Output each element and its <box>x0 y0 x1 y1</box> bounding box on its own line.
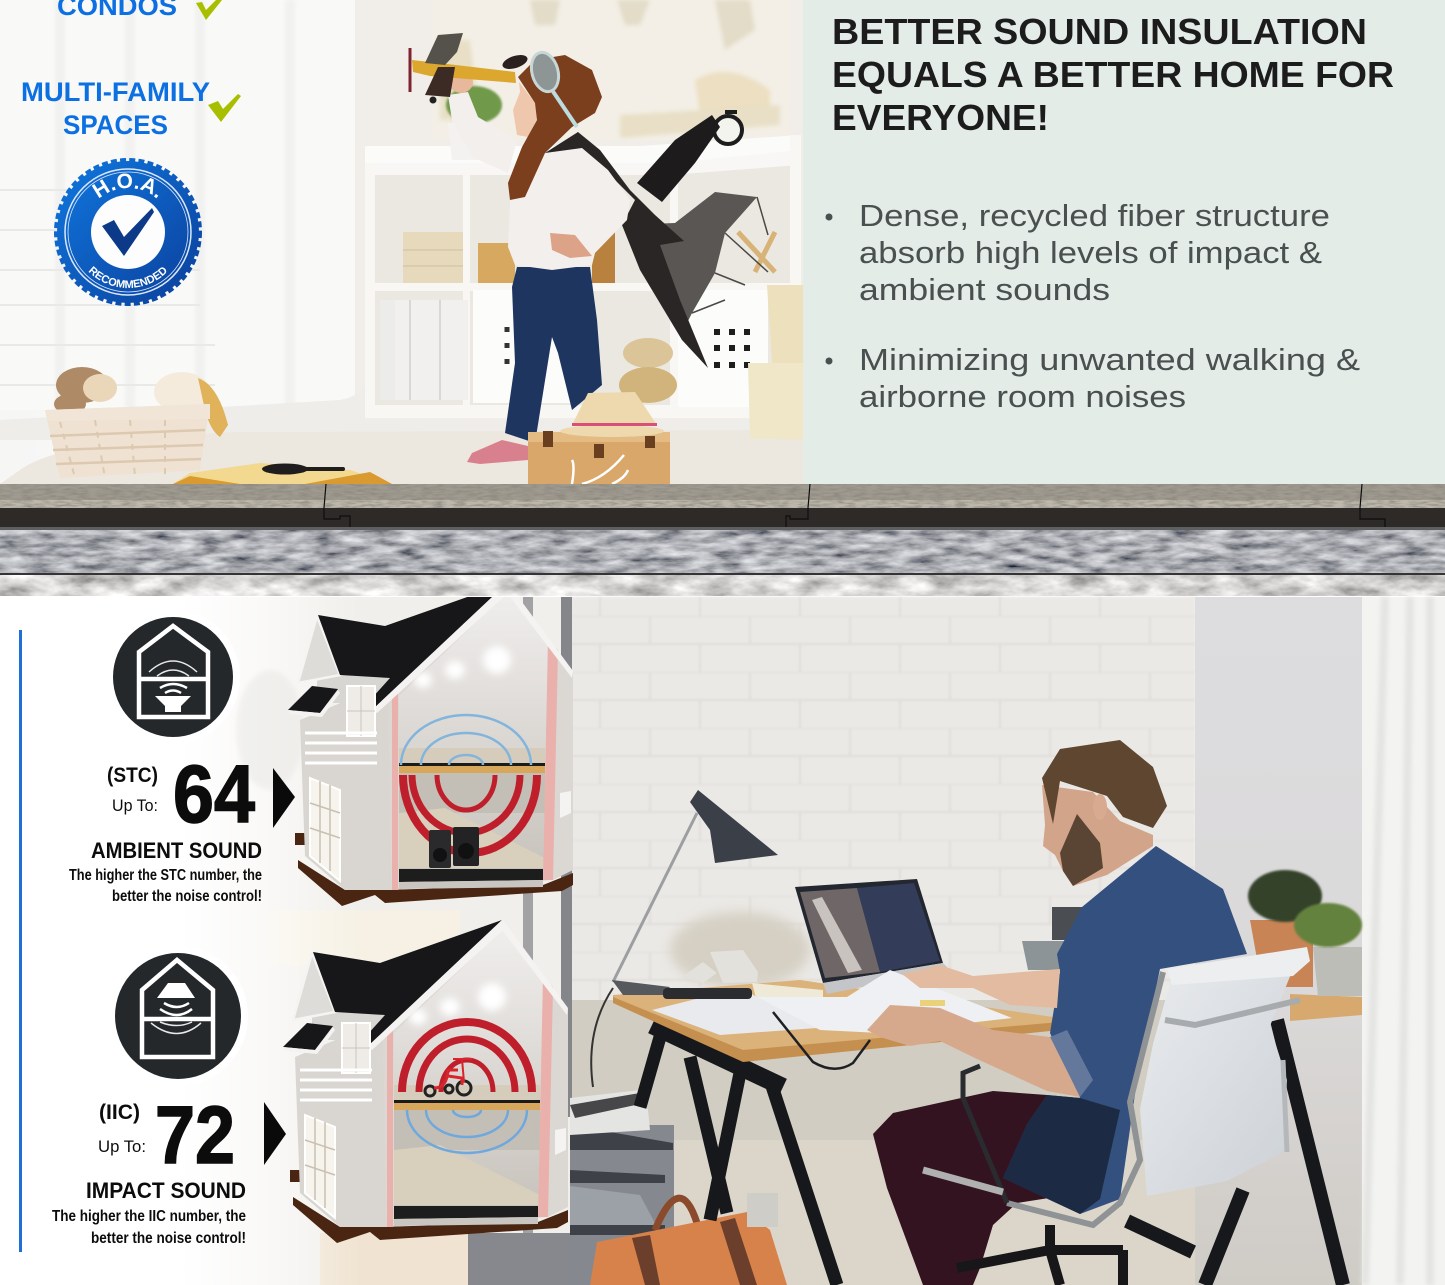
icon: speakers <box>429 827 479 868</box>
heading: EVERYONE! <box>832 97 1049 138</box>
alarm clock <box>714 112 742 144</box>
heading <box>832 11 1394 138</box>
bullet: minimizing noises: airborne room noises <box>859 379 1186 414</box>
icon: condos check mark <box>196 0 222 20</box>
text: impact sound: The higher the IIC number, the <box>52 1208 246 1225</box>
white sweater <box>508 148 630 270</box>
bullet: dense fiber structure: Dense, recycled fiber structure <box>859 198 1330 233</box>
icon: multi-family check mark <box>208 94 241 122</box>
blue transmitted sound waves <box>407 1110 527 1153</box>
aviator hat <box>508 55 602 200</box>
shirt <box>1003 846 1247 1214</box>
trousers <box>873 1091 1100 1285</box>
text: impact sound <box>52 1178 246 1247</box>
text: multi-family spaces: MULTI-FAMILY <box>21 77 210 107</box>
airborne blue sound waves <box>401 715 531 765</box>
text: multi-family spaces <box>21 77 210 140</box>
potted plant <box>446 86 502 160</box>
suitcase <box>528 431 670 484</box>
badge: H.O.A. recommended <box>54 158 202 306</box>
flying scarf <box>545 115 768 368</box>
IIC rating: Up To: <box>98 1137 146 1156</box>
panel: better sound insulation <box>803 0 1445 484</box>
chair base <box>957 1225 1123 1285</box>
wall outlet <box>747 1193 778 1227</box>
laptop <box>795 879 950 994</box>
bullet: minimizing noises: Minimizing unwanted walking & <box>859 342 1360 377</box>
face <box>513 82 538 137</box>
badge: H.O.A. recommended: H.O.A. <box>92 174 158 198</box>
text: ambient sound: AMBIENT SOUND <box>91 838 262 863</box>
photo: man working at a desk <box>0 597 1445 1285</box>
raised arm <box>448 92 517 173</box>
toys: basket, teddy and bunny <box>45 367 392 484</box>
house cutaway: impact sound <box>283 920 568 1243</box>
badge: H.O.A. recommended: RECOMMENDED <box>88 266 166 288</box>
potted plants <box>1248 870 1362 996</box>
desk top <box>613 980 1060 1052</box>
red impact sound waves <box>402 1022 532 1092</box>
child with aviator hat and toy plane <box>410 33 768 484</box>
jeans <box>505 267 602 443</box>
red sound waves <box>403 775 537 853</box>
floor cross-section band <box>0 484 1445 597</box>
head <box>1042 785 1153 886</box>
desk with lamp and laptop <box>591 790 1362 1285</box>
house cutaway: ambient sound <box>288 583 573 906</box>
heading: BETTER SOUND INSULATION <box>832 11 1367 52</box>
bullet: dense fiber structure: absorb high levels of impact & <box>859 235 1322 270</box>
wall map <box>432 0 790 140</box>
far arm <box>902 965 1060 1008</box>
text: multi-family spaces: SPACES <box>63 110 168 140</box>
trestle legs <box>640 1020 1343 1285</box>
hair <box>1042 740 1167 828</box>
lamp <box>591 790 778 1087</box>
text: impact sound: better the noise control! <box>91 1230 246 1247</box>
near arm <box>867 1005 1080 1097</box>
icon: impact sound circle <box>108 946 248 1086</box>
mug <box>1022 941 1066 970</box>
bullet: dense fiber structure <box>826 198 1330 307</box>
man in blue shirt seated on office chair <box>867 740 1310 1285</box>
toy plane <box>410 33 516 104</box>
wire cart and leather bag <box>468 1090 787 1285</box>
white fade behind sound ratings <box>0 597 360 1285</box>
arrow: STC <box>273 768 295 828</box>
STC rating: 64 <box>173 749 255 840</box>
text: ambient sound: better the noise control! <box>112 888 262 905</box>
heading: EQUALS A BETTER HOME FOR <box>832 54 1394 95</box>
leather bag <box>590 1198 787 1285</box>
ghosted plant <box>236 670 304 790</box>
STC rating: Up To: <box>112 796 158 815</box>
sneaker <box>467 440 528 464</box>
IIC rating <box>98 1090 235 1181</box>
icon: ambient sound circle <box>106 610 240 744</box>
desk tray <box>682 950 758 983</box>
IIC rating: 72 <box>155 1090 235 1181</box>
text: ambient sound <box>69 838 262 905</box>
photo: child playing pilot in a bright room <box>0 0 803 484</box>
blue vertical rule <box>19 630 22 1252</box>
straw hat <box>560 392 664 437</box>
STC rating <box>107 749 255 840</box>
shelving unit <box>365 135 803 440</box>
text: impact sound: IMPACT SOUND <box>86 1178 246 1203</box>
bullet: minimizing noises <box>826 342 1360 414</box>
STC rating: (STC) <box>107 764 158 787</box>
IIC rating: (IIC) <box>99 1101 140 1124</box>
bullet: dense fiber structure: ambient sounds <box>859 272 1110 307</box>
icon: tricycle <box>425 1059 472 1096</box>
text: ambient sound: The higher the STC number, the <box>69 867 262 884</box>
arrow: IIC <box>264 1102 286 1165</box>
papers <box>652 970 1012 1069</box>
chair back <box>1140 969 1293 1196</box>
